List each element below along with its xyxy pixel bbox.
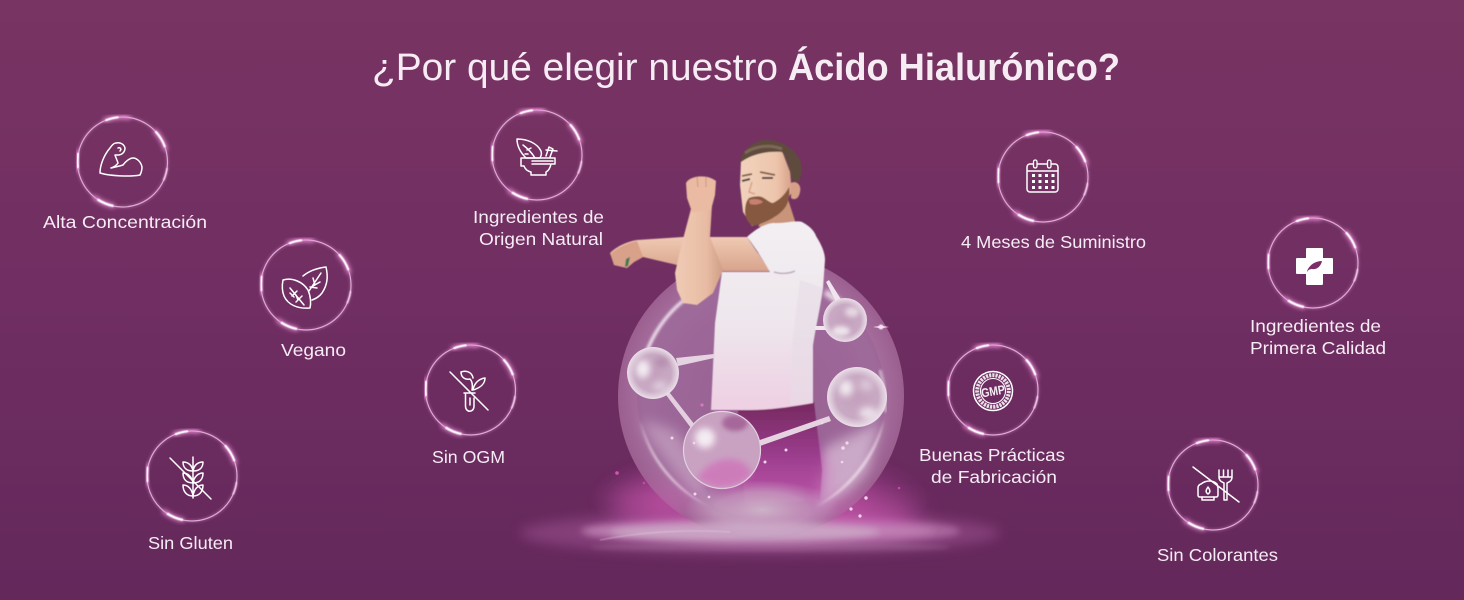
nose shadow — [749, 182, 755, 194]
label: Sin OGM — [432, 447, 505, 467]
icon: no wheat — [170, 457, 211, 499]
icon: GMP seal — [974, 372, 1012, 410]
label: Primera Calidad — [1250, 338, 1386, 358]
sphere left — [627, 347, 679, 399]
title — [372, 45, 1120, 89]
label: de Fabricación — [931, 467, 1057, 487]
label: Buenas Prácticas — [919, 445, 1065, 465]
icon: no dye — [1193, 467, 1239, 502]
label: Alta Concentración — [43, 212, 207, 232]
label — [473, 207, 604, 249]
ring — [948, 345, 1038, 435]
ring — [77, 117, 168, 207]
man stretching — [610, 140, 825, 505]
sticks — [663, 280, 842, 446]
icon: two leaves — [282, 267, 327, 308]
feature: Sin Colorantes — [1157, 440, 1278, 565]
ring — [147, 431, 237, 521]
feature: Vegano — [261, 240, 351, 360]
sparkles — [615, 403, 900, 518]
label: Origen Natural — [479, 229, 603, 249]
pants — [738, 402, 822, 505]
fist — [686, 176, 716, 212]
icon: flexed arm — [100, 143, 142, 176]
label: Sin Gluten — [148, 533, 233, 553]
feature: Alta Concentración — [43, 117, 207, 232]
star sparkle — [873, 324, 889, 330]
icon: no GMO — [450, 371, 488, 411]
ring — [1268, 218, 1358, 308]
raised upper arm — [675, 205, 723, 305]
label — [1250, 316, 1386, 358]
feature: Buenas Prácticas de Fabricación — [919, 345, 1065, 487]
beard — [745, 187, 789, 226]
magenta interior lower — [717, 430, 833, 526]
sphere large — [683, 411, 761, 489]
face — [740, 151, 792, 226]
ring — [261, 240, 351, 330]
hair — [740, 140, 802, 182]
extended forearm — [610, 237, 770, 271]
label: Ingredientes de — [473, 207, 604, 227]
icon: cross with leaf — [1296, 248, 1333, 285]
feature: Sin OGM — [425, 345, 516, 467]
label: 4 Meses de Suministro — [961, 232, 1146, 252]
title: ¿Por qué elegir nuestro — [372, 47, 778, 89]
eyes — [742, 178, 773, 181]
ear — [791, 182, 800, 199]
ring — [998, 132, 1088, 222]
label: Vegano — [281, 340, 346, 360]
floor glow and water ripples — [520, 446, 1000, 555]
sphere right — [827, 367, 887, 427]
icon: calendar — [1027, 160, 1058, 192]
icon: mortar and leaf — [517, 139, 557, 175]
sphere upper right — [823, 298, 867, 342]
molecule — [627, 280, 889, 489]
feature: Ingredientes de Primera Calidad — [1250, 218, 1386, 358]
t-shirt — [711, 221, 825, 410]
bubble — [618, 253, 904, 539]
mist at bubble base — [585, 480, 950, 552]
title: Ácido Hialurónico? — [788, 45, 1120, 89]
ring — [1168, 440, 1258, 530]
icon: GMP seal: GMP — [980, 383, 1006, 400]
ring — [492, 110, 582, 200]
label: Ingredientes de — [1250, 316, 1381, 336]
feature: Sin Gluten — [147, 431, 237, 553]
label — [919, 445, 1065, 487]
feature: Ingredientes de Origen Natural — [473, 110, 604, 249]
feature: 4 Meses de Suministro — [961, 132, 1146, 252]
ring — [425, 345, 516, 435]
label: Sin Colorantes — [1157, 545, 1278, 565]
neck — [758, 196, 796, 232]
